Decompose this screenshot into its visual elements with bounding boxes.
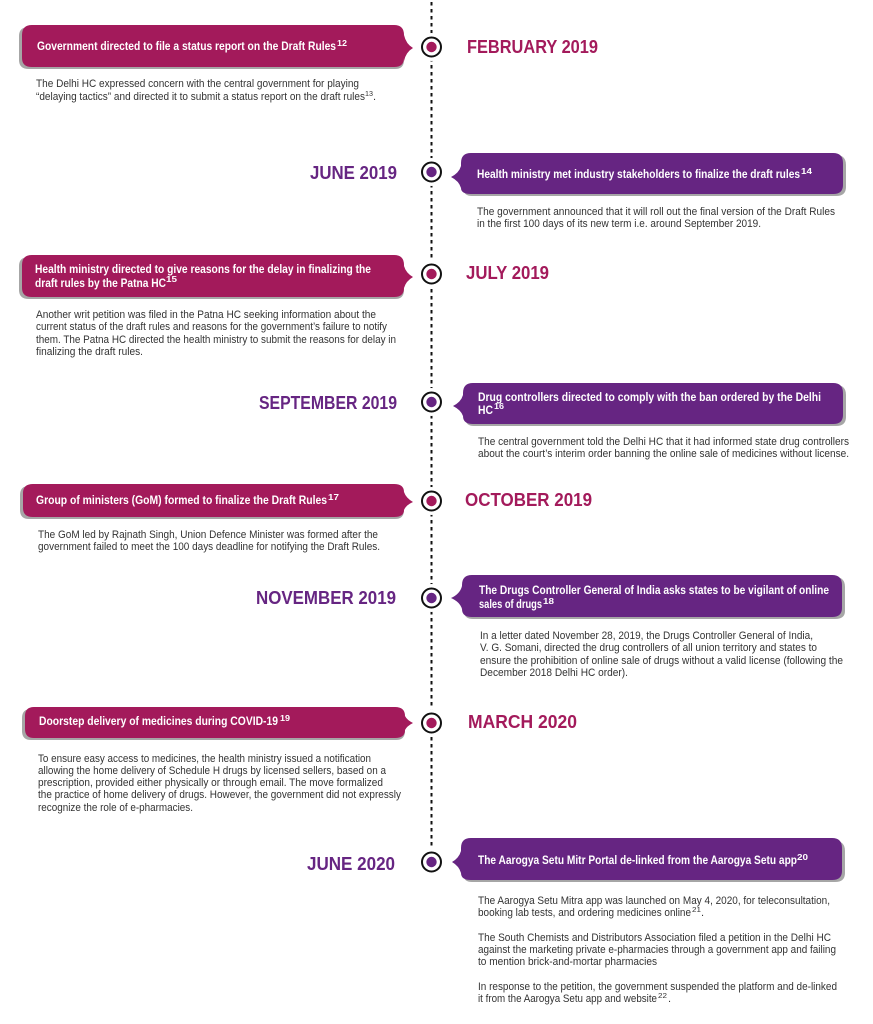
callout: health ministry directed by Patna HC: draft rules by the Patna HC (35, 278, 166, 290)
callout: drug controllers directed to comply: 16 (494, 402, 505, 411)
text block: June 2020 detail: The South Chemists and Distributors Association filed a petition in the Delhi HC (478, 932, 831, 944)
callout: Aarogya Setu Mitr portal de-linked: The Aarogya Setu Mitr Portal de-linked from the Aarogya Setu app (478, 855, 797, 867)
marker: June 2019 (418, 158, 446, 186)
text block: September 2019 detail (478, 436, 849, 460)
date: February 2019: FEBRUARY 2019 (467, 37, 598, 57)
text block: July 2019 detail: them. The Patna HC directed the health ministry to submit the reasons for delay in (36, 334, 396, 346)
text block: June 2020 detail: In response to the petition, the government suspended the platform and de-linked (478, 981, 837, 993)
text block: February 2019 detail (36, 78, 376, 103)
text block: October 2019 detail: The GoM led by Rajnath Singh, Union Defence Minister was formed after the (38, 529, 378, 541)
date: October 2019: OCTOBER 2019 (465, 490, 592, 510)
callout: Aarogya Setu Mitr portal de-linked: 20 (797, 853, 809, 862)
date: July 2019: JULY 2019 (466, 263, 549, 283)
callout: health ministry met industry stakeholders (451, 153, 846, 196)
text block: March 2020 detail: the practice of home delivery of drugs. However, the government did not expressly (38, 789, 401, 801)
date: November 2019: NOVEMBER 2019 (256, 588, 396, 608)
callout: doorstep delivery during COVID-19: 19 (280, 714, 291, 723)
callout: drug controllers directed to comply: HC (478, 405, 493, 417)
callout: group of ministers formed: Group of ministers (GoM) formed to finalize the Draft Rules (36, 495, 327, 507)
marker: March 2020 (418, 709, 446, 737)
callout: government directed to file status report: Government directed to file a status report on the Draft Rules (37, 41, 336, 53)
marker: November 2019 (418, 584, 446, 612)
text block: March 2020 detail: recognize the role of e-pharmacies. (38, 802, 193, 814)
callout: drug controllers directed to comply (453, 383, 846, 426)
text block: October 2019 detail (38, 529, 380, 553)
callout: group of ministers formed (20, 484, 413, 519)
event: July 2019 (19, 255, 549, 358)
text block: November 2019 detail (480, 630, 843, 679)
text block: October 2019 detail: government failed to meet the 100 days deadline for notifying the Draft Rules. (38, 541, 380, 553)
event: March 2020 (22, 707, 577, 814)
date: March 2020: MARCH 2020 (468, 712, 577, 732)
text block: February 2019 detail: 13 (365, 91, 373, 98)
callout: health ministry directed by Patna HC: Health ministry directed to give reasons for the delay in finalizing the (35, 264, 371, 276)
callout: DCGI asks states to be vigilant: sales of drugs (479, 599, 542, 611)
event: September 2019 (259, 383, 849, 460)
text block: March 2020 detail (38, 753, 401, 814)
text block: June 2019 detail (477, 206, 835, 230)
text block: July 2019 detail: finalizing the draft rules. (36, 346, 143, 358)
text block: June 2020 detail: booking lab tests, and ordering medicines online (478, 907, 691, 919)
marker: February 2019 (418, 33, 446, 61)
event: February 2019 (19, 25, 598, 103)
callout: government directed to file status report (19, 25, 413, 69)
callout: DCGI asks states to be vigilant: 18 (543, 597, 555, 606)
text block: July 2019 detail: current status of the draft rules and reasons for the government’s failure to notify (36, 321, 387, 333)
callout: Aarogya Setu Mitr portal de-linked (452, 838, 845, 882)
event: June 2020 (307, 838, 845, 1005)
text block: February 2019 detail: . (373, 91, 376, 103)
callout: government directed to file status report: 12 (337, 39, 348, 48)
text block: June 2020 detail: 22 (658, 993, 667, 1000)
callout: health ministry directed by Patna HC (19, 255, 413, 299)
text block: November 2019 detail: December 2018 Delhi HC order). (480, 667, 628, 679)
text block: June 2020 detail: to mention brick-and-mortar pharmacies (478, 956, 657, 968)
text block: February 2019 detail: “delaying tactics” and directed it to submit a status report on the draft rules (36, 91, 365, 103)
callout: health ministry met industry stakeholders: Health ministry met industry stakeholders to finalize the draft rules (477, 169, 800, 181)
callout: drug controllers directed to comply: Drug controllers directed to comply with the ban ordered by the Delhi (478, 392, 821, 404)
date: June 2020: JUNE 2020 (307, 854, 395, 874)
text block: June 2020 detail (478, 895, 837, 1005)
callout: doorstep delivery during COVID-19 (22, 707, 413, 740)
callout: DCGI asks states to be vigilant (451, 575, 845, 619)
marker: July 2019 (418, 260, 446, 288)
text block: November 2019 detail: V. G. Somani, directed the drug controllers of all union territory and states to (480, 642, 817, 654)
callout: DCGI asks states to be vigilant: The Drugs Controller General of India asks states to be vigilant of online (479, 585, 829, 597)
date: June 2019: JUNE 2019 (310, 163, 397, 183)
callout: group of ministers formed: 17 (328, 493, 340, 502)
text block: March 2020 detail: allowing the home delivery of Schedule H drugs by licensed sellers, based on a (38, 765, 387, 777)
text block: March 2020 detail: To ensure easy access to medicines, the health ministry issued a notification (38, 753, 371, 765)
date: September 2019: SEPTEMBER 2019 (259, 393, 397, 413)
text block: June 2020 detail: . (668, 993, 671, 1005)
text block: February 2019 detail: The Delhi HC expressed concern with the central government for playing (36, 78, 359, 90)
callout: health ministry met industry stakeholders: 14 (801, 167, 813, 176)
text block: March 2020 detail: prescription, provided either physically or through email. The move formalized (38, 777, 383, 789)
callout: doorstep delivery during COVID-19: Doorstep delivery of medicines during COVID-19 (39, 716, 278, 728)
text block: June 2019 detail: The government announced that it will roll out the final version of the Draft Rules (477, 206, 835, 218)
text block: July 2019 detail: Another writ petition was filed in the Patna HC seeking information about the (36, 309, 376, 321)
text block: June 2020 detail: The Aarogya Setu Mitra app was launched on May 4, 2020, for teleconsultation, (478, 895, 830, 907)
text block: November 2019 detail: In a letter dated November 28, 2019, the Drugs Controller General of India, (480, 630, 813, 642)
text block: June 2020 detail: it from the Aarogya Setu app and website (478, 993, 657, 1005)
text block: June 2020 detail: . (701, 907, 704, 919)
marker: June 2020 (418, 848, 446, 876)
callout: health ministry directed by Patna HC: 15 (166, 275, 178, 284)
text block: September 2019 detail: about the court’s interim order banning the online sale of medicines without license. (478, 448, 849, 460)
event: October 2019 (20, 484, 592, 553)
text block: November 2019 detail: ensure the prohibition of online sale of drugs without a valid license (following the (480, 655, 843, 667)
text block: June 2020 detail: 21 (692, 907, 701, 914)
text block: June 2019 detail: in the first 100 days of its new term i.e. around September 2019. (477, 218, 761, 230)
text block: June 2020 detail: against the marketing private e-pharmacies through a government app and failing (478, 944, 836, 956)
text block: September 2019 detail: The central government told the Delhi HC that it had informed state drug controllers (478, 436, 849, 448)
marker: September 2019 (418, 388, 446, 416)
text block: July 2019 detail (36, 309, 396, 358)
marker: October 2019 (418, 487, 446, 515)
event: November 2019 (256, 575, 845, 679)
event: June 2019 (310, 153, 846, 230)
